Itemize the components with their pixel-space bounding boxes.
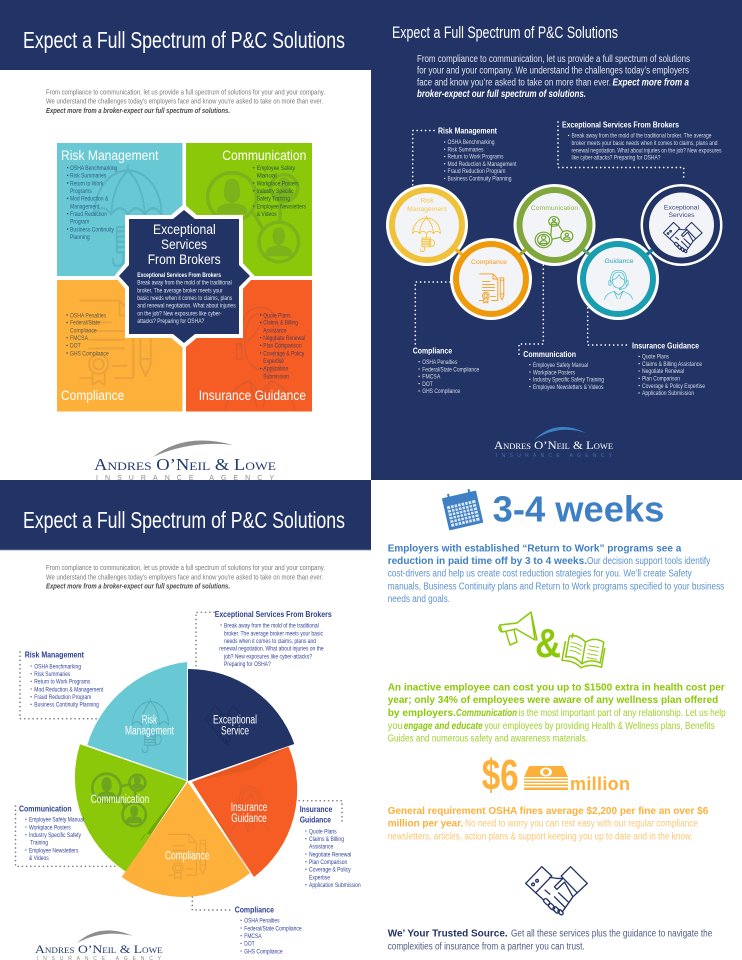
quadrant: risk management [57,143,182,276]
icon: document watermark [80,301,151,385]
list: Risk Summaries [70,173,107,180]
list: communication: Training [30,840,48,847]
list: exceptional services: Exceptional Services From Brokers [215,609,332,619]
list: exceptional services: renewal negotiation. What about injuries on the [219,646,324,653]
list: & Videos [257,211,277,218]
list: Negotiate Renewal [263,335,305,342]
list: insurance guidance: Quote Plans [309,828,337,835]
list: Compliance [70,327,97,334]
list: exceptional services: Break away from the mold of the traditional [224,622,319,630]
list: insurance guidance: Application Submission [309,882,361,889]
stat: 3-4 weeks [388,488,724,605]
text block: million per year. [388,819,463,830]
list: communication: Communication [523,349,576,359]
callout body: Break away from the mold of the traditional [137,280,232,287]
title: Expect a Full Spectrum of P&C Solutions [23,507,345,533]
intro text: Expect more from a [612,77,689,88]
list: Safety Training [257,196,290,203]
quadrant: communication [186,143,312,276]
text block [388,929,713,953]
slice labels: Service [221,726,249,738]
node: compliance [450,238,532,320]
list: exceptional services: Preparing for OSHA? [224,661,271,668]
list: insurance guidance: Negotiate Renewal [642,368,684,375]
list: Employee Newsletters [257,203,307,210]
list: insurance guidance: Plan Comparison [642,376,680,382]
list: risk management: Mod Reduction & Management [34,686,103,693]
list: risk management: Fraud Reduction Program [448,168,506,175]
icon: agent watermark [226,307,294,409]
stat: trusted source [388,867,713,953]
node: communication [514,184,596,266]
node: risk management: Management [407,206,447,213]
list: OSHA Benchmarking [70,165,118,172]
list: compliance: Compliance [413,346,452,356]
list: Planning [70,234,90,241]
text block: complexities of insurance from a partner you can trust. [388,942,585,953]
list: Plan Comparison [263,343,302,350]
stat: communication [388,612,726,744]
callout: exceptional services [117,206,252,346]
list: insurance guidance: Claims & Billing [309,836,344,843]
list: exceptional services: Exceptional Services From Brokers [562,120,679,130]
slice: risk management [87,662,187,780]
list: risk management [438,126,517,182]
text block [388,543,724,605]
text block: Our decision support tools identify [587,556,710,567]
icon: umbrella [413,216,440,252]
quadrant: compliance [57,280,182,412]
quadrant: insurance guidance [186,280,312,412]
icon: megaphone [499,612,537,645]
list: insurance guidance: Negotiate Renewal [309,851,352,858]
slice labels: Management [125,726,175,738]
logo: Andres O'Neil & Lowe [494,427,613,459]
list: risk management: Risk Management [438,126,497,136]
slice: communication [75,744,187,872]
icon: handshake [663,222,702,253]
big number: 3-4 weeks [493,489,664,530]
list: exceptional services: like cyber-attacks? Preparing for OSHA? [572,155,661,162]
list: insurance guidance: Quote Plans [642,354,670,361]
text block: General requirement OSHA fines average $2,200 per fine an over $6 [388,806,709,817]
list: Management [70,203,99,210]
list: communication: Employee Newsletters [29,847,79,854]
list: Workplace Posters [257,180,299,187]
icon: document [480,274,504,303]
logo: Andres O'Neil & Lowe: Andres O’Neil & Lowe [35,942,163,956]
node: guidance [577,238,659,320]
list: compliance: Federal/State Compliance [244,925,302,932]
panel: pie chart infographic (bottom left) [0,480,371,960]
pie chart [75,662,297,897]
list: communication [523,349,604,391]
list: risk management: Risk Summaries [448,146,484,153]
list: Expertise [263,358,284,365]
list: risk management [25,649,103,709]
text block: by employers. [388,708,456,719]
list [67,165,118,241]
list: Industry Specific [257,188,294,195]
intro text: Expect more from a broker-expect our full spectrum of solutions. [46,106,230,115]
panel: circle chain infographic (top right) [371,0,742,480]
list: communication: Employee Safety Manual [533,362,588,369]
list: compliance: OSHA Penalties [244,918,280,925]
list: risk management: Risk Summaries [34,671,71,678]
list: risk management: Business Continuity Planning [34,702,99,709]
logo: Andres O'Neil & Lowe: Andres O’Neil & Lowe [494,438,613,452]
list: insurance guidance: Assistance [309,844,334,851]
stat: $6 million [388,751,709,842]
text block: engage and educate [404,721,483,732]
big number: $6 [482,751,519,800]
callout body: basic needs when it comes to claims, plans [137,295,233,302]
intro text [46,88,325,115]
list: exceptional services: job? New exposures like cyber-attacks? [223,653,312,660]
callout body [137,272,236,325]
heading: Risk Management [61,148,159,163]
list: insurance guidance: Insurance [300,804,333,814]
list: compliance [413,346,480,395]
node: exceptional services [640,184,722,266]
list: Employee Safety [257,165,296,172]
text block [388,806,709,842]
list [253,165,307,218]
logo: Andres O'Neil & Lowe: INSURANCE AGENCY [496,453,613,459]
list: compliance: Federal/State Compliance [422,366,480,373]
title: Expect a Full Spectrum of P&C Solutions [392,24,618,42]
slice labels: Risk [142,714,157,726]
intro text: We understand the challenges today’s employers face and know you’re asked to take on more than ever. [46,572,323,582]
list: insurance guidance [300,804,361,889]
list: Assistance [263,327,287,334]
list: risk management: Fraud Reduction Program [34,694,92,701]
slice: insurance guidance [192,747,297,877]
slice labels: Compliance [165,850,209,862]
callout body: on the job? New exposures like cyber- [137,310,222,317]
list: Coverage & Policy [263,350,305,357]
list: Quote Plans [263,312,291,319]
intro text: We understand the challenges today’s employers face and know you’re asked to take on more than ever. [46,96,323,106]
list: communication: Communication [19,803,72,813]
word: million: million [570,774,630,794]
list: risk management: Risk Management [25,649,84,659]
intro text: From compliance to communication, let us provide a full spectrum of solutions for your and your company. [46,88,325,96]
list: compliance [235,904,302,955]
list [66,312,109,357]
list: DOT [70,343,81,350]
ring joins [456,250,652,254]
icon: money stack [524,766,568,790]
intro text: face and know you’re asked to take on more than ever. [417,77,611,88]
list: exceptional services [215,609,332,668]
header band [0,480,371,550]
list: compliance: DOT [422,381,433,388]
list: insurance guidance: Coverage & Policy [309,867,351,874]
header band [0,0,371,70]
callout body: Exceptional Services From Brokers [137,272,221,279]
icon: people network watermark [208,173,299,262]
list: communication: Employee Safety Manual [29,817,84,824]
callout heading: Services [161,237,207,252]
list: communication: Industry Specific Safety Training [533,377,604,384]
list: Manual [257,173,277,180]
list: Submission [263,373,289,380]
list: risk management: Business Continuity Planning [448,176,512,182]
text block: reduction in paid time off by 3 to 4 weeks. [388,556,587,567]
list: Mod Reduction & [70,196,109,203]
list: Claims & Billing [263,320,298,327]
list: compliance: FMCSA [244,933,262,940]
intro text: From compliance to communication, let us provide a full spectrum of solutions for your and your company. [46,563,325,572]
title: Expect a Full Spectrum of P&C Solutions [23,27,345,53]
list: Programs [70,188,92,195]
list: risk management: OSHA Benchmarking [448,139,495,146]
list: insurance guidance: Application Submission [642,390,694,397]
text block: An inactive employee can cost you up to $1500 extra in health cost per [388,682,725,694]
list: OSHA Penalties [70,312,107,319]
list: insurance guidance: Coverage & Policy Expertise [642,383,705,390]
slice: compliance [122,782,250,897]
list: compliance: OSHA Penalties [422,359,458,366]
callout heading: From Brokers [148,252,221,267]
list: exceptional services: needs when it comes to claims, plans and [224,638,316,645]
list: compliance: FMCSA [422,374,441,381]
slice: exceptional service [188,669,294,781]
list: Program [70,219,90,226]
text block: needs and goals. [388,594,450,605]
list: insurance guidance: Claims & Billing Assistance [642,361,702,368]
text block: year; only 34% of employees were aware of any wellness plan offered [388,695,718,706]
list: exceptional services: broker. The average broker meets your basic [224,630,324,637]
icon: open book [561,633,606,671]
callout body: attacks? Preparing for OSHA? [137,318,205,325]
list: communication: Employee Newsletters & Videos [533,384,604,391]
logo: Andres O'Neil & Lowe [94,441,276,482]
list: communication [19,803,84,862]
text block: Communication [456,708,517,719]
node: compliance: Compliance [471,259,507,266]
panel: statistics column (bottom right) [388,488,726,953]
list: risk management: Return to Work Programs [448,154,504,161]
panel: quadrant infographic (top left) [0,0,371,482]
node: communication: Communication [531,205,578,212]
list: risk management: OSHA Benchmarking [34,663,81,670]
node: risk management: Risk [420,198,434,204]
slice labels [91,714,267,862]
list: Application [263,366,289,373]
text block: We’ Your Trusted Source. [388,929,508,940]
list: risk management: Mod Reduction & Management [448,161,517,168]
heading: Insurance Guidance [199,388,306,403]
list: Business Continuity [70,226,115,233]
intro text: broker-expect our full spectrum of solutions. [417,89,586,100]
list: Federal/State [70,320,100,327]
intro text: Expect more from a broker-expect our full spectrum of solutions. [46,582,230,591]
callout body: and renewal negotiation. What about injuries [137,303,236,310]
list: GHS Compliance [70,350,109,357]
list: insurance guidance: Expertise [309,874,330,881]
text block: you [388,721,403,732]
icon: handshake [526,867,587,916]
node: exceptional services: Exceptional [664,204,700,212]
node: risk management [386,184,468,266]
intro text [417,54,690,100]
text block: Employers with established “Return to Work” programs see a [388,543,682,554]
list: Fraud Reduction [70,211,107,218]
list: compliance: GHS Compliance [244,948,283,955]
callout body: broker. The average broker meets your [137,287,223,294]
dotted connectors [16,612,342,910]
list: risk management: Return to Work Programs [34,679,91,686]
list: insurance guidance: Plan Comparison [309,859,348,866]
slice labels: Exceptional [213,714,257,726]
list: Return to Work [70,180,104,187]
list: compliance: DOT [244,941,255,948]
list: FMCSA [70,335,88,342]
logo: Andres O'Neil & Lowe: INSURANCE AGENCY [96,475,274,482]
list: communication: Workplace Posters [29,824,71,831]
logo: Andres O'Neil & Lowe: Andres O’Neil & Lowe [94,455,276,474]
icon: agent [605,270,632,299]
text block: No need to worry you can rest easy with our regular compliance [465,819,698,830]
list: communication: & Videos [29,855,49,862]
list: communication: Workplace Posters [533,369,576,376]
logo: Andres O'Neil & Lowe [35,930,163,960]
list: insurance guidance [632,341,705,397]
list [260,312,305,380]
intro text [46,563,325,591]
list: compliance: Compliance [235,904,274,914]
callout heading: Exceptional [153,222,216,237]
list: insurance guidance: Guidance [300,815,331,825]
list: insurance guidance: Insurance Guidance [632,341,699,351]
list: exceptional services [562,120,722,162]
ampersand: & [535,620,561,666]
node: exceptional services: Services [668,212,695,219]
heading: Communication [222,148,306,163]
dotted connectors [413,122,684,355]
list: compliance: GHS Compliance [422,388,461,395]
icon: calendar [441,488,483,531]
icon: people network [535,217,573,248]
callout heading [148,222,221,267]
text block [388,682,726,744]
slice labels: Insurance [231,802,267,814]
node: guidance: Guidance [604,258,634,265]
list: communication: Industry Specific Safety [29,832,82,839]
slice labels: Guidance [231,813,267,825]
icon: umbrella watermark [94,165,162,266]
slice labels: Communication [91,794,149,806]
heading: Compliance [61,388,124,403]
text block: Guides and numerous safety and awareness materials. [388,734,588,744]
